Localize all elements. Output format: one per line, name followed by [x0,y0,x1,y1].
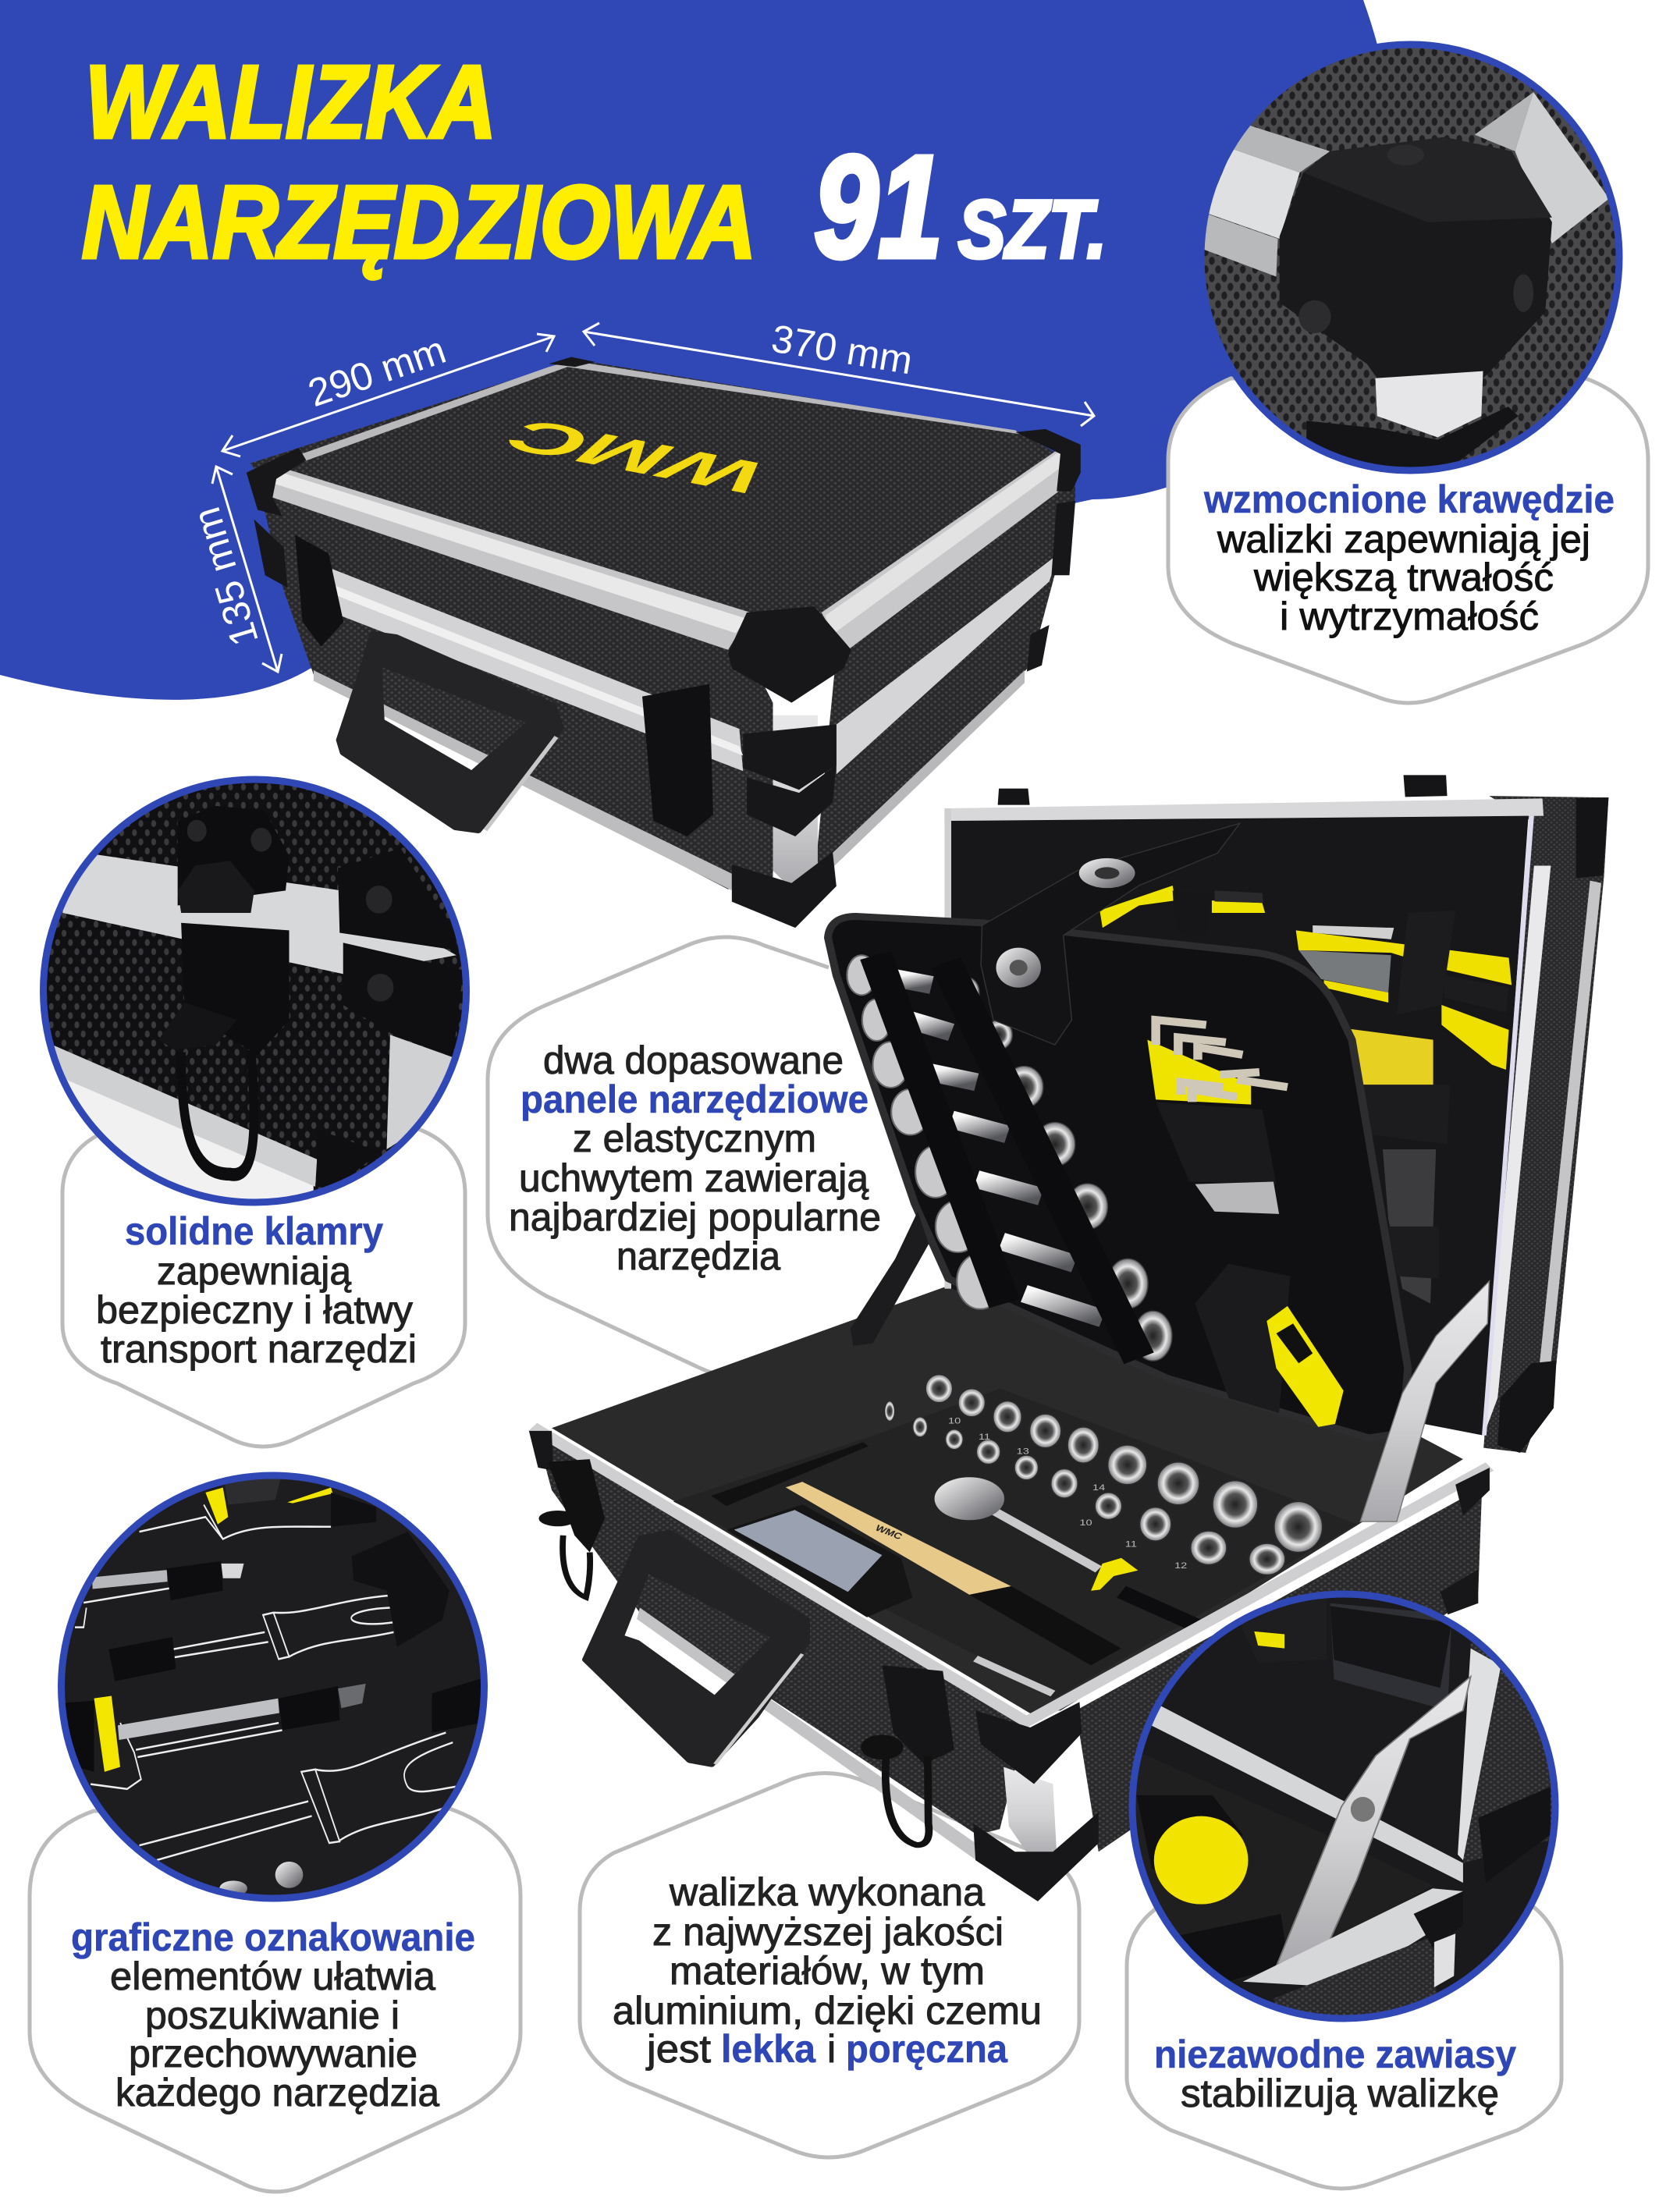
open suitcase: base [529,1286,1490,1901]
text: walizka wykonana: z najwyższej jakości [652,1910,1004,1954]
latches [295,534,713,836]
hammer [711,1442,1121,1665]
socket size numbers: 11 [1125,1539,1137,1549]
right hinge arm [1360,1281,1489,1521]
bubble: graficzne oznakowanie [30,1809,520,2192]
text: solidne klamry [96,1209,417,1371]
quantity: 91 szt.: 91 [814,126,943,288]
dimension: 290 mm: 290 mm [303,328,451,415]
ratchet [935,1477,1197,1626]
bit box [726,1504,912,1617]
sockets [884,1375,1323,1575]
socket size numbers [948,1415,1187,1570]
text: dwa dopasowane panele: narzędzia [616,1234,780,1278]
socket size numbers: 10 [1079,1518,1092,1527]
pliers and screwdriver behind panel [1099,886,1265,936]
text: niezawodne zawiasy: stabilizują walizkę [1181,2072,1499,2115]
dimension: 370 mm: 370 mm [769,317,915,382]
text: solidne klamry: solidne klamry [125,1209,383,1253]
text: wzmocnione krawędzie [1203,478,1615,638]
text: graficzne oznakowanie: graficzne oznakowanie [71,1916,475,1959]
text: solidne klamry: bezpieczny i łatwy [96,1288,413,1332]
hammer: WMC [873,1523,904,1542]
bubble: niezawodne zawiasy [1127,1904,1561,2189]
photo circle: reinforced corner [1199,37,1629,478]
circle border: hinge [1132,1594,1555,2018]
title [82,44,756,279]
text: walizka wykonana [613,1870,1042,2071]
bit holder [975,1659,1053,1694]
text: walizka wykonana: lekka [721,2027,816,2071]
text: wzmocnione krawędzie: wzmocnione krawędzie [1203,478,1615,521]
socket size numbers: 13 [1017,1446,1029,1456]
circle border: latch [44,779,467,1202]
wrenches [847,955,1172,1361]
foam interior [552,1286,1463,1713]
text: dwa dopasowane panele: z elastycznym [573,1117,816,1160]
bubble: wzmocnione krawędzie [1168,378,1648,703]
base corner caps [529,1431,1490,1901]
text: walizka wykonana: i [827,2027,836,2071]
text: walizka wykonana: walizka wykonana [669,1870,985,1914]
hex key set [1147,1020,1288,1214]
text: graficzne oznakowanie: przechowywanie [129,2032,417,2075]
dimension: 290 mm [222,328,554,456]
photo circle: graphic markings [65,1479,481,1894]
strap with snap [981,823,1240,1045]
aluminium rim [533,1427,1490,1722]
precision screwdriver box [1349,1029,1450,1304]
utility knife [1296,911,1512,1070]
text: walizka wykonana: jest [645,2027,711,2071]
bubble: solidne klamry [62,1129,465,1447]
text: solidne klamry: transport narzędzi [101,1327,417,1371]
socket size numbers: 12 [1174,1560,1187,1570]
bubble: dwa dopasowane panele [488,937,829,1377]
text: wzmocnione krawędzie: większą trwałość [1253,556,1554,599]
dimension: 135 mm [184,467,282,672]
text: dwa dopasowane panele: dwa dopasowane [543,1039,844,1082]
text: graficzne oznakowanie [71,1916,475,2114]
text: dwa dopasowane panele: panele narzędziowe [520,1078,869,1121]
title: NARZĘDZIOWA [82,165,756,279]
photo circle: latch [47,783,463,1198]
text: graficzne oznakowanie: każdego narzędzia [115,2071,439,2114]
latches with loops [539,1459,954,1845]
socket size numbers: 11 [979,1432,990,1441]
text: graficzne oznakowanie: poszukiwanie i [145,1994,400,2037]
lid shell [944,775,1608,1453]
socket size numbers: 14 [1092,1482,1105,1492]
dimension: 135 mm: 135 mm [184,502,267,651]
WMC logo on lid: WMC [499,409,775,504]
text: walizka wykonana: poręczna [846,2027,1008,2071]
lid corner caps [247,357,1081,928]
text: dwa dopasowane panele: najbardziej popularne [509,1195,881,1239]
open suitcase: lid with tool panel [828,775,1608,1521]
circle border: markings [61,1475,484,1898]
handle [339,634,560,830]
text: solidne klamry: zapewniają [157,1249,351,1293]
text: walizka wykonana: materiałów, w tym [670,1949,985,1993]
quantity: 91 szt. [814,126,1107,288]
left support arm [851,1212,929,1346]
dimension: 370 mm [584,317,1094,426]
text: wzmocnione krawędzie: walizki zapewniają jej [1217,517,1590,561]
circle border: corner [1201,44,1619,470]
text: wzmocnione krawędzie: i wytrzymałość [1280,595,1539,638]
text: graficzne oznakowanie: elementów ułatwia [110,1955,435,1998]
photo circle: hinge [1136,1598,1551,2015]
bubble: walizka wykonana [580,1773,1079,2157]
text: niezawodne zawiasy: niezawodne zawiasy [1154,2033,1516,2076]
text: dwa dopasowane panele [509,1039,881,1278]
blue header background [0,0,1395,700]
text: dwa dopasowane panele: uchwytem zawierają [519,1156,869,1200]
title: WALIZKA [85,44,496,159]
socket size numbers: 10 [948,1415,961,1426]
fabric tool panel [828,917,1408,1438]
text: niezawodne zawiasy [1154,2033,1516,2115]
quantity: 91 szt.: SZT. [958,184,1107,275]
handle [586,1532,806,1764]
tape measure [1195,1264,1344,1427]
closed suitcase [247,357,1081,928]
text: walizka wykonana: aluminium, dzięki czemu [613,1989,1042,2033]
